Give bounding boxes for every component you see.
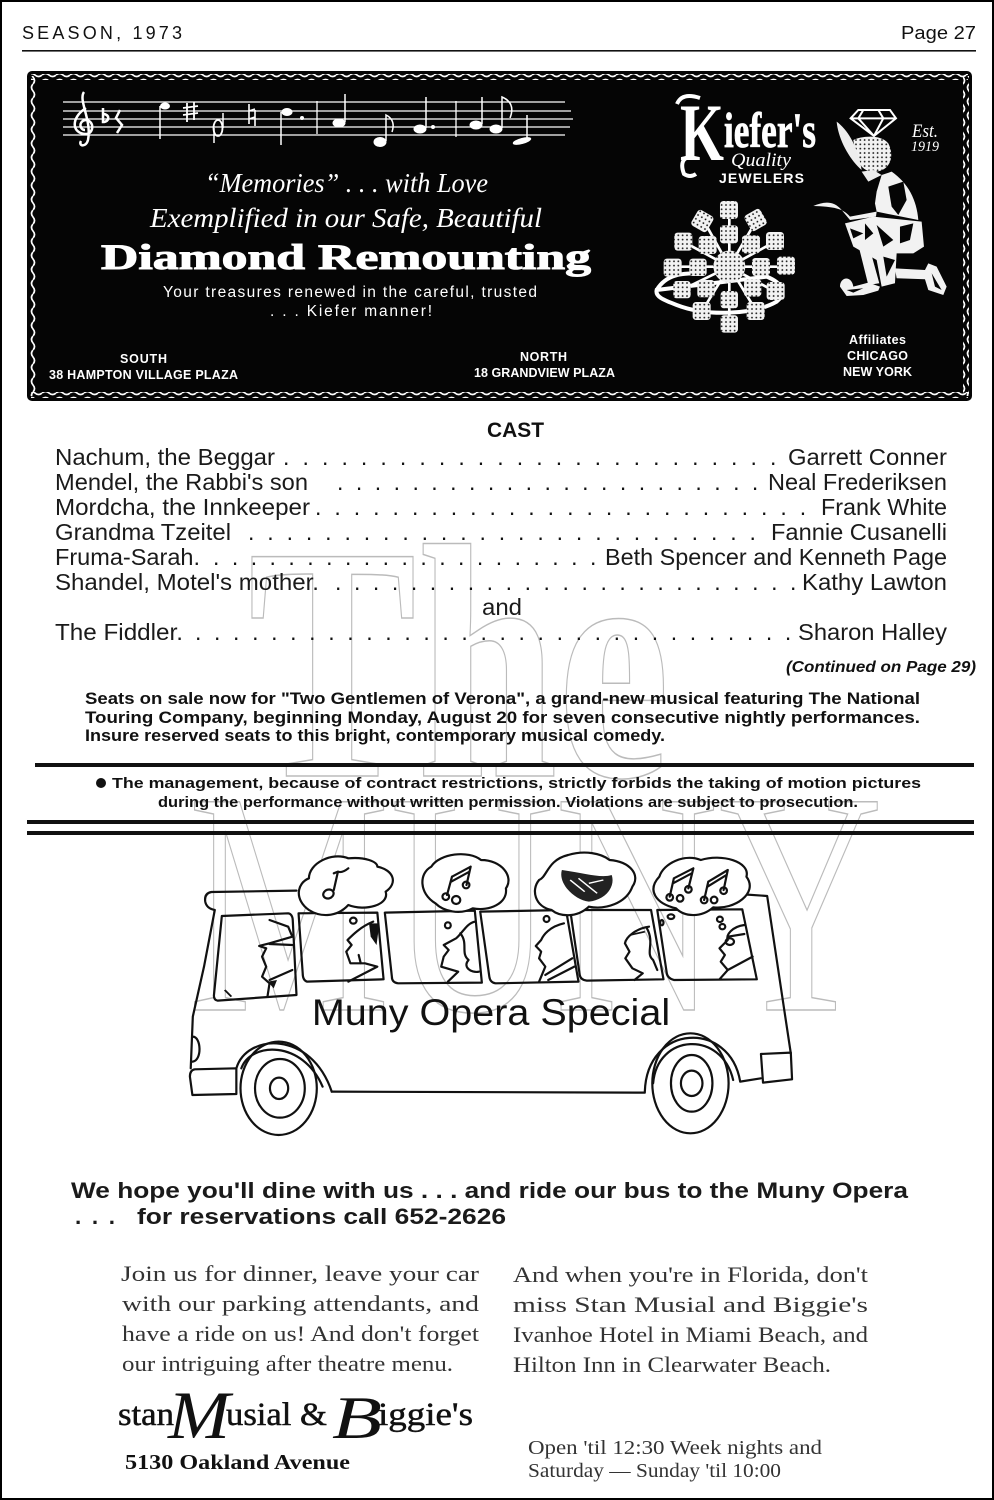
cast list: Fannie Cusanelli: [771, 519, 947, 545]
text: dinner and parking: [121, 1261, 480, 1376]
panel: Kiefer's jewelers advertisement: [27, 71, 972, 401]
management notice: The management, because of contract restrictions, strictly forbids the taking of motion pictures: [112, 776, 921, 792]
cast list: (Continued on Page 29): [786, 659, 976, 676]
management notice: during the performance without written permission. Violations are subject to prosecution.: [158, 795, 858, 811]
ad addresses: NEW YORK: [843, 365, 912, 379]
helmet and plume: [837, 122, 891, 182]
seats on sale notice: Touring Company, beginning Monday, August 20 for seven consecutive nightly performances.: [85, 709, 920, 727]
illustration: Muny Opera Special bus: [190, 853, 792, 1135]
text: Florida hotels: Hilton Inn in Clearwater Beach.: [513, 1352, 831, 1377]
wheels: [240, 1033, 729, 1135]
management notice: [27, 763, 974, 835]
Kiefer's logo: Est.: [911, 121, 938, 142]
icon: musical staff: [63, 92, 573, 146]
page header: SEASON, 1973: [22, 23, 182, 43]
restaurant logo and address: 5130 Oakland Avenue: [125, 1450, 350, 1474]
icon: diamond brooch: [656, 201, 795, 333]
Kiefer's logo: Quality: [731, 150, 792, 171]
restaurant logo and address: B: [332, 1385, 382, 1451]
dine and ride headline: for reservations call 652-2626: [137, 1204, 506, 1229]
passengers: [225, 920, 753, 997]
dine and ride headline: [71, 1178, 909, 1229]
cast list: [55, 444, 976, 676]
cast list: Nachum, the Beggar: [55, 444, 275, 470]
seats on sale notice: Insure reserved seats to this bright, contemporary musical comedy.: [85, 727, 665, 745]
ad headline: [101, 168, 591, 320]
cast list: Mendel, the Rabbi's son: [55, 469, 308, 495]
Kiefer's logo: 1919: [911, 139, 939, 155]
ad addresses: NORTH: [520, 350, 567, 364]
cast list: Shandel, Motel's mother.: [55, 569, 319, 595]
Kiefer's logo: iefer's: [724, 102, 816, 158]
windows: [214, 909, 757, 1001]
ad addresses: CHICAGO: [847, 349, 908, 363]
seats on sale notice: Seats on sale now for "Two Gentlemen of Verona", a grand-new musical featuring The National: [85, 690, 920, 708]
cast list: .........................: [335, 569, 809, 595]
cast list: Sharon Halley: [798, 619, 948, 645]
page header: Page 27: [901, 23, 976, 43]
heading: cast: CAST: [487, 418, 544, 442]
cast list: ..........................: [315, 494, 819, 520]
cast list: The Fiddler.: [55, 619, 183, 645]
bumpers: [190, 1053, 792, 1095]
restaurant logo and address: usial &: [226, 1397, 327, 1433]
ad headline: Exemplified in our Safe, Beautiful: [149, 203, 542, 233]
watermark: The Muny: The: [248, 478, 670, 849]
cast list: and: [482, 594, 522, 620]
restaurant logo and address: M: [167, 1377, 234, 1453]
restaurant logo and address: iggie's: [378, 1397, 473, 1433]
opening hours: [528, 1437, 822, 1482]
ad headline: . . . Kiefer manner!: [270, 303, 432, 320]
text: Florida hotels: Ivanhoe Hotel in Miami Beach, and: [513, 1322, 868, 1347]
music notes and steak: [321, 867, 728, 929]
bus body: [191, 891, 791, 1093]
icon: kneeling jester with diamond: [813, 110, 947, 296]
ad headline: Diamond Remounting: [101, 237, 591, 277]
watermark: The Muny: [188, 478, 883, 1079]
restaurant logo and address: [118, 1377, 473, 1474]
ad addresses: Affiliates: [849, 333, 906, 347]
cast list: ..........................: [283, 444, 789, 470]
cast list: Frank White: [821, 494, 947, 520]
opening hours: Saturday — Sunday 'til 10:00: [528, 1460, 781, 1482]
cast list: Kathy Lawton: [802, 569, 947, 595]
page header: [22, 23, 976, 52]
text: Florida hotels: And when you're in Florida, don't: [513, 1262, 869, 1287]
seats on sale notice: [85, 690, 920, 745]
thought bubbles: [299, 853, 750, 915]
diamond: [851, 110, 896, 136]
Kiefer's logo: K: [680, 87, 724, 178]
cast list: Neal Frederiksen: [768, 469, 947, 495]
restaurant logo and address: stan: [118, 1397, 174, 1433]
ad headline: Your treasures renewed in the careful, trusted: [163, 284, 537, 301]
bus caption: Muny Opera Special: [312, 992, 670, 1033]
ad headline: “Memories” . . . with Love: [205, 168, 488, 198]
cast list: .......................: [337, 469, 771, 495]
cast list: Grandma Tzeitel: [55, 519, 231, 545]
Kiefer's logo: [677, 87, 939, 186]
cast list: ................................: [195, 619, 804, 645]
cast list: Mordcha, the Innkeeper: [55, 494, 310, 520]
cast list: Beth Spencer and Kenneth Page: [605, 544, 947, 570]
ad addresses: [49, 333, 912, 382]
ad addresses: 38 HAMPTON VILLAGE PLAZA: [49, 368, 238, 382]
text: dinner and parking: our intriguing after theatre menu.: [122, 1351, 453, 1376]
text: dinner and parking: with our parking attendants, and: [122, 1291, 479, 1316]
text: dinner and parking: Join us for dinner, leave your car: [121, 1261, 480, 1286]
dine and ride headline: . . .: [75, 1204, 115, 1229]
wheel arches: [236, 1038, 761, 1092]
cast list: ...........................: [248, 519, 769, 545]
cast list: Garrett Conner: [788, 444, 947, 470]
cast list: .....................: [213, 544, 609, 570]
ad addresses: SOUTH: [120, 352, 167, 366]
dine and ride headline: We hope you'll dine with us . . . and ride our bus to the Muny Opera: [71, 1178, 909, 1203]
text: dinner and parking: have a ride on us! And don't forget: [122, 1321, 480, 1346]
Kiefer's logo: JEWELERS: [719, 170, 804, 186]
cast list: Fruma-Sarah.: [55, 544, 200, 570]
body and legs: [813, 172, 947, 296]
text: Florida hotels: [513, 1262, 869, 1377]
text: Florida hotels: miss Stan Musial and Biggie's: [513, 1292, 868, 1317]
ad addresses: 18 GRANDVIEW PLAZA: [474, 366, 615, 380]
opening hours: Open 'til 12:30 Week nights and: [528, 1437, 822, 1459]
